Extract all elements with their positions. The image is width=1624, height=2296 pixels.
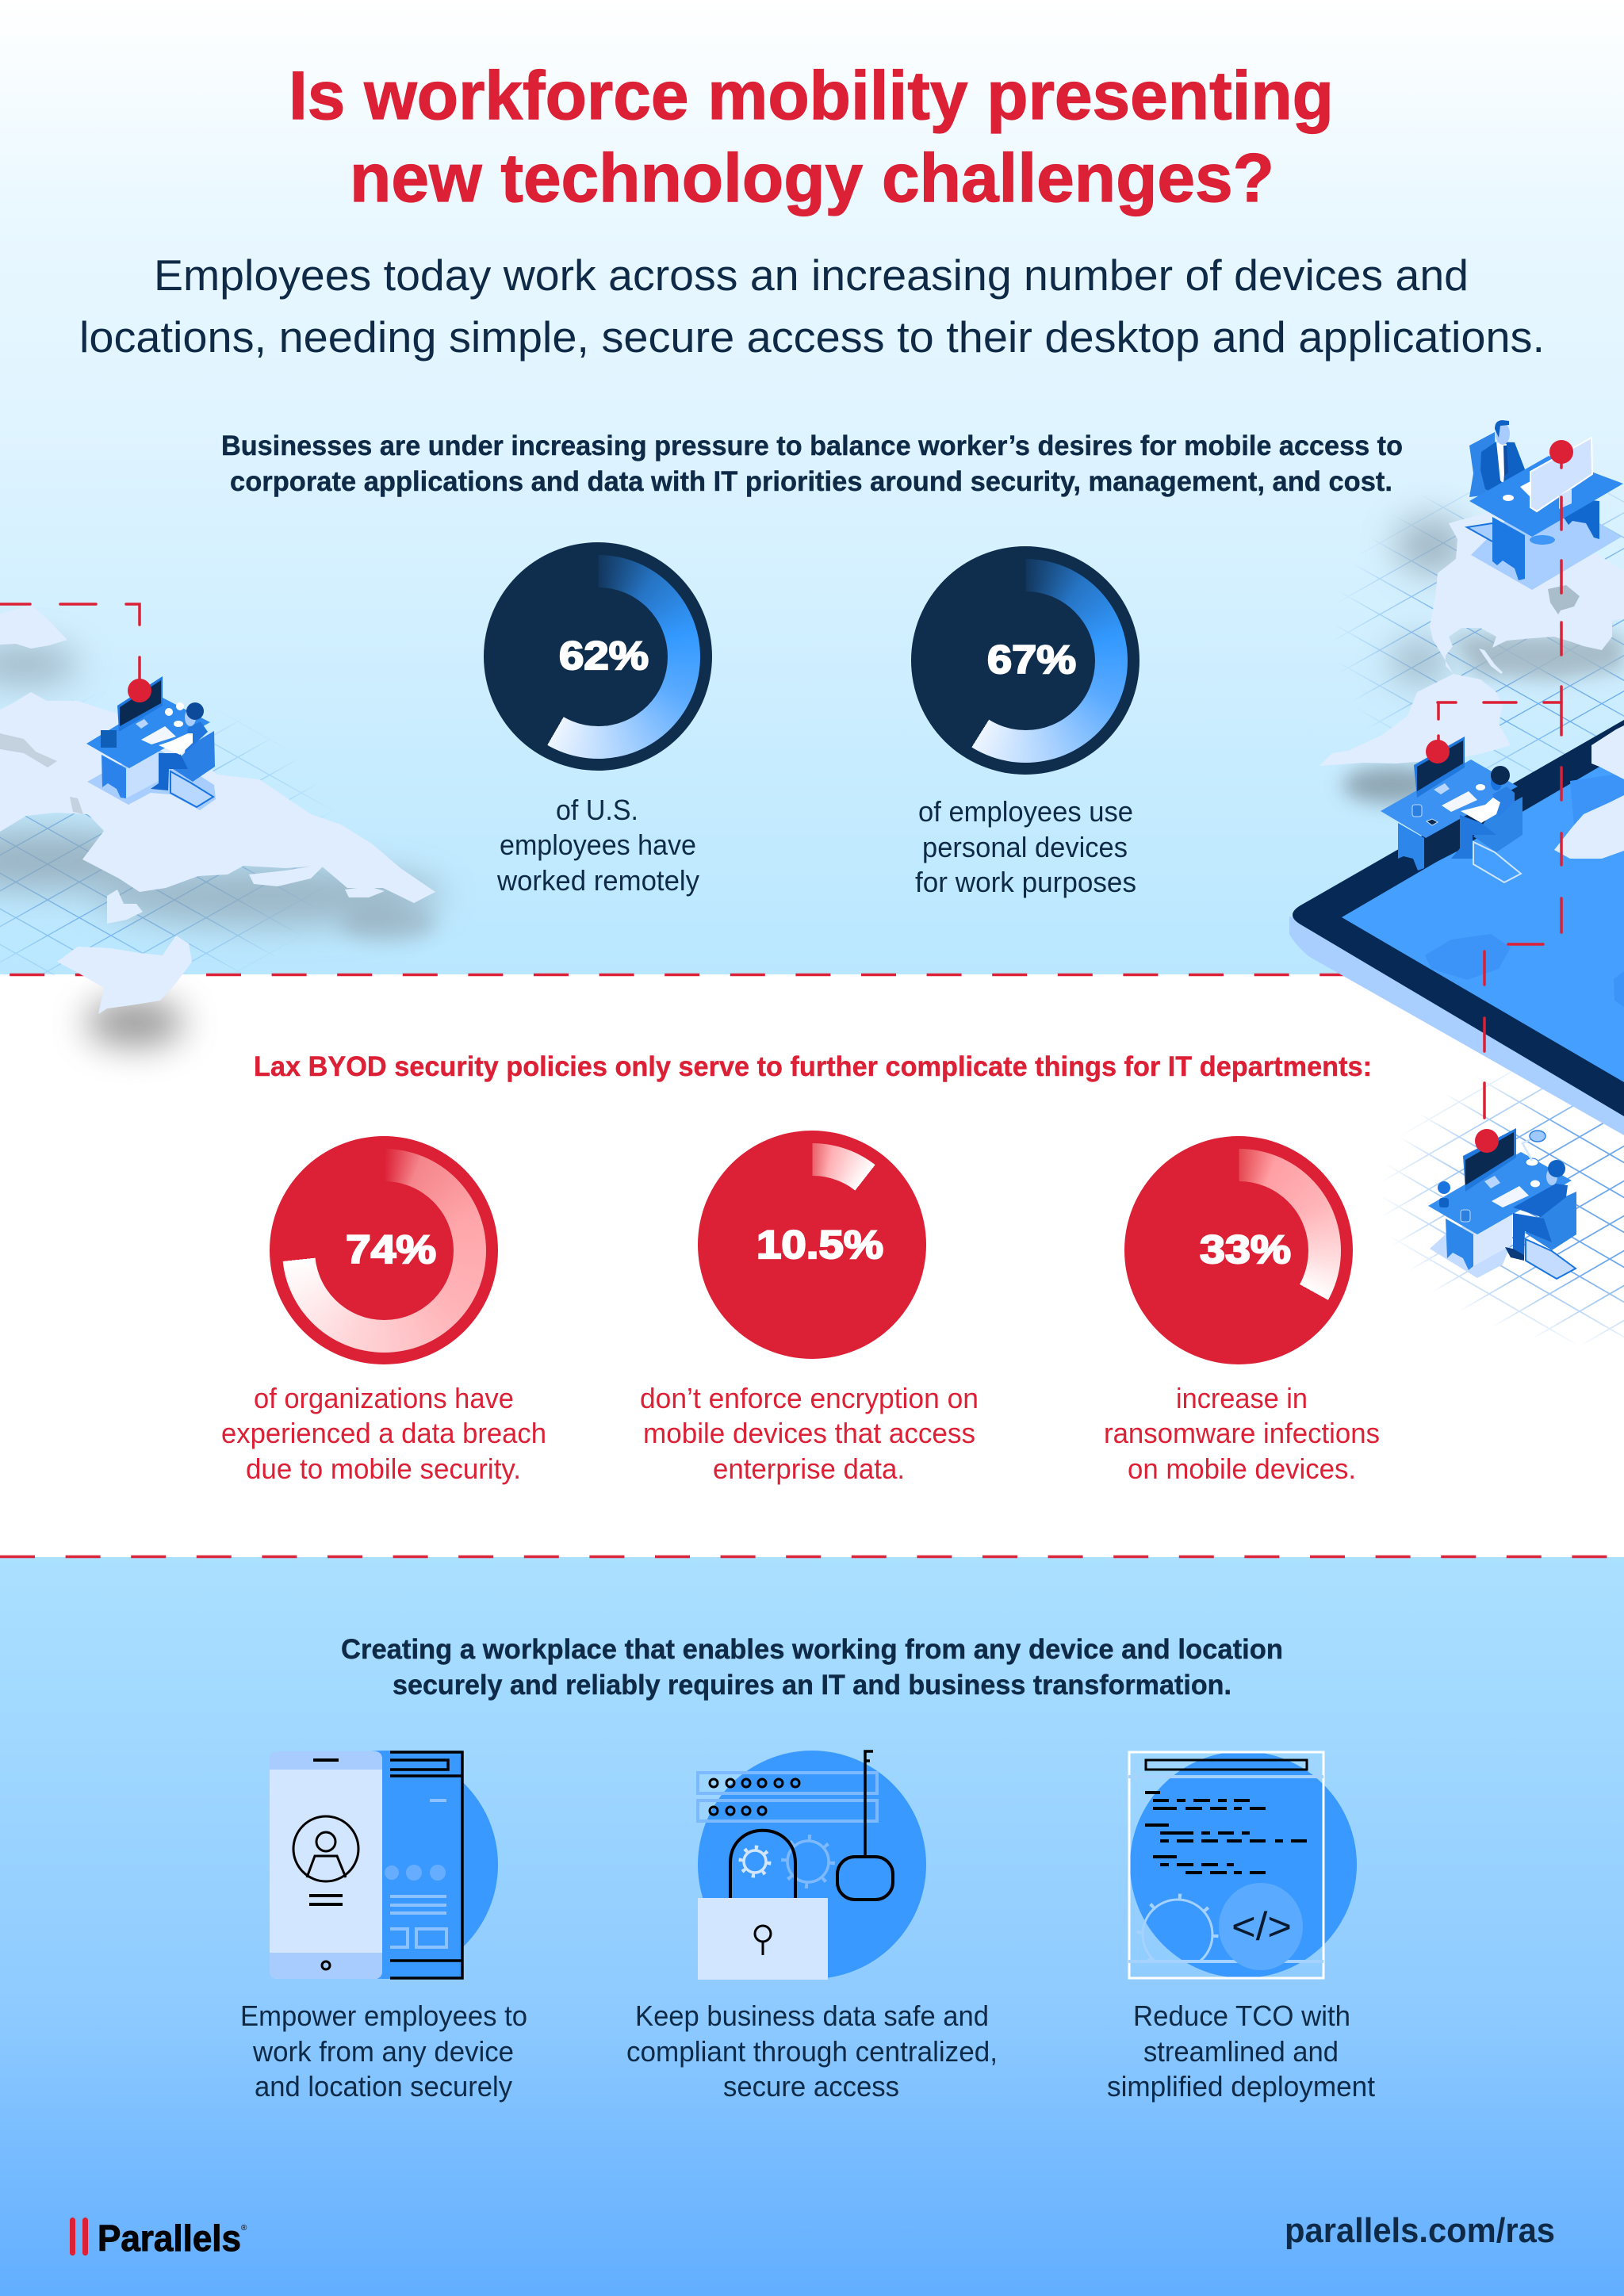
footer url: parallels.com/ras — [1285, 2211, 1555, 2250]
stat value: 74%: 74% — [346, 1227, 436, 1272]
section divider: upper dashed line — [0, 974, 1348, 976]
stat value: 67%: 67% — [987, 637, 1076, 682]
illustration: top right desk worker — [1467, 420, 1623, 590]
stat label: 10.5%: don’t enforce encryption on — [640, 1382, 979, 1414]
caption: keep data safe: Keep business data safe and — [635, 1999, 989, 2032]
caption: empower employees: and location securely — [255, 2070, 512, 2103]
stat label: 74%: due to mobile security. — [246, 1452, 521, 1485]
stat label: 74%: experienced a data breach — [221, 1417, 546, 1449]
caption: keep data safe: secure access — [723, 2070, 899, 2103]
caption: empower employees: Empower employees to — [240, 1999, 527, 2032]
caption: reduce TCO: Reduce TCO with — [1133, 1999, 1350, 2032]
illustration: left desk worker — [86, 676, 216, 810]
icon: mobile phone with user profile — [270, 1751, 498, 1979]
stat label: 67%: for work purposes — [915, 866, 1136, 898]
donut: 74% — [270, 1136, 498, 1364]
stat label: 10.5% — [640, 1382, 979, 1485]
stat value: 62%: 62% — [559, 633, 649, 678]
intro text: business pressure: Businesses are under increasing pressure to balance worker’s desires for mobile access to — [221, 430, 1403, 461]
donut: 62% — [484, 542, 712, 771]
stat label: 74% — [221, 1382, 546, 1485]
section heading: workplace transformation — [341, 1634, 1283, 1701]
stat label: 33%: on mobile devices. — [1128, 1452, 1356, 1485]
stat label: 67%: of employees use — [918, 795, 1133, 828]
logo: Parallels: Parallels — [98, 2218, 241, 2259]
caption: reduce TCO: simplified deployment — [1107, 2070, 1375, 2103]
connector: red dashed route lines and pins — [0, 440, 1573, 1153]
icon: code deployment document: </> — [1231, 1904, 1292, 1949]
donut: 33% — [1124, 1136, 1353, 1364]
icon: code deployment document — [1128, 1751, 1357, 1978]
subtitle: Employees today work across an increasing number of devices and — [154, 251, 1469, 300]
stat label: 33%: ransomware infections — [1104, 1417, 1380, 1449]
stat label: 10.5%: enterprise data. — [713, 1452, 905, 1485]
illustration: world maps, tablet, desks — [0, 420, 1624, 2256]
stat label: 62%: worked remotely — [496, 864, 699, 897]
subtitle: locations, needing simple, secure access to their desktop and applications. — [79, 312, 1545, 362]
caption: reduce TCO: streamlined and — [1143, 2035, 1339, 2068]
map: right world map — [1320, 492, 1624, 815]
stat label: 10.5%: mobile devices that access — [643, 1417, 975, 1449]
subtitle — [79, 251, 1545, 362]
caption: keep data safe: compliant through centralized, — [626, 2035, 998, 2068]
caption: empower employees — [240, 1999, 527, 2103]
map: left world map — [0, 605, 444, 1047]
section divider: lower dashed line — [0, 1556, 1624, 1558]
background: bottom section — [0, 1557, 1624, 2296]
title — [289, 58, 1334, 216]
background: top section — [0, 0, 1624, 974]
stat value: 10.5%: 10.5% — [756, 1223, 883, 1267]
section heading: BYOD: Lax BYOD security policies only serve to further complicate things for IT departments: — [254, 1051, 1372, 1082]
title: new technology challenges? — [350, 140, 1274, 216]
title: Is workforce mobility presenting — [289, 58, 1334, 134]
illustration: middle desk worker — [1381, 737, 1522, 882]
map: bottom right grid — [1386, 1071, 1624, 1343]
stat label: 67% — [915, 795, 1136, 898]
caption: reduce TCO — [1107, 1999, 1375, 2103]
donut: 67% — [911, 546, 1139, 775]
stat label: 67%: personal devices — [922, 831, 1128, 863]
stat label: 33% — [1104, 1382, 1380, 1485]
section heading: workplace transformation: securely and reliably requires an IT and business transformation. — [393, 1670, 1231, 1701]
caption: empower employees: work from any device — [252, 2035, 514, 2068]
stat value: 33%: 33% — [1200, 1227, 1291, 1272]
caption: keep data safe — [626, 1999, 998, 2103]
stat label: 62% — [496, 794, 699, 897]
intro text: business pressure: corporate applications and data with IT priorities around security, management, and cost. — [230, 466, 1392, 497]
intro text: business pressure — [221, 430, 1403, 497]
section heading: workplace transformation: Creating a workplace that enables working from any device and location — [341, 1634, 1283, 1665]
illustration: bottom right desk worker — [1428, 1128, 1576, 1279]
stat label: 33%: increase in — [1176, 1382, 1308, 1414]
stat label: 74%: of organizations have — [254, 1382, 514, 1414]
illustration: tablet — [1289, 720, 1624, 1135]
icon: secure login with padlock — [698, 1751, 926, 1980]
logo: Parallels: ® — [241, 2224, 247, 2233]
donut: 10.5% — [698, 1131, 926, 1359]
stat label: 62%: employees have — [500, 828, 696, 861]
stat label: 62%: of U.S. — [556, 794, 638, 826]
